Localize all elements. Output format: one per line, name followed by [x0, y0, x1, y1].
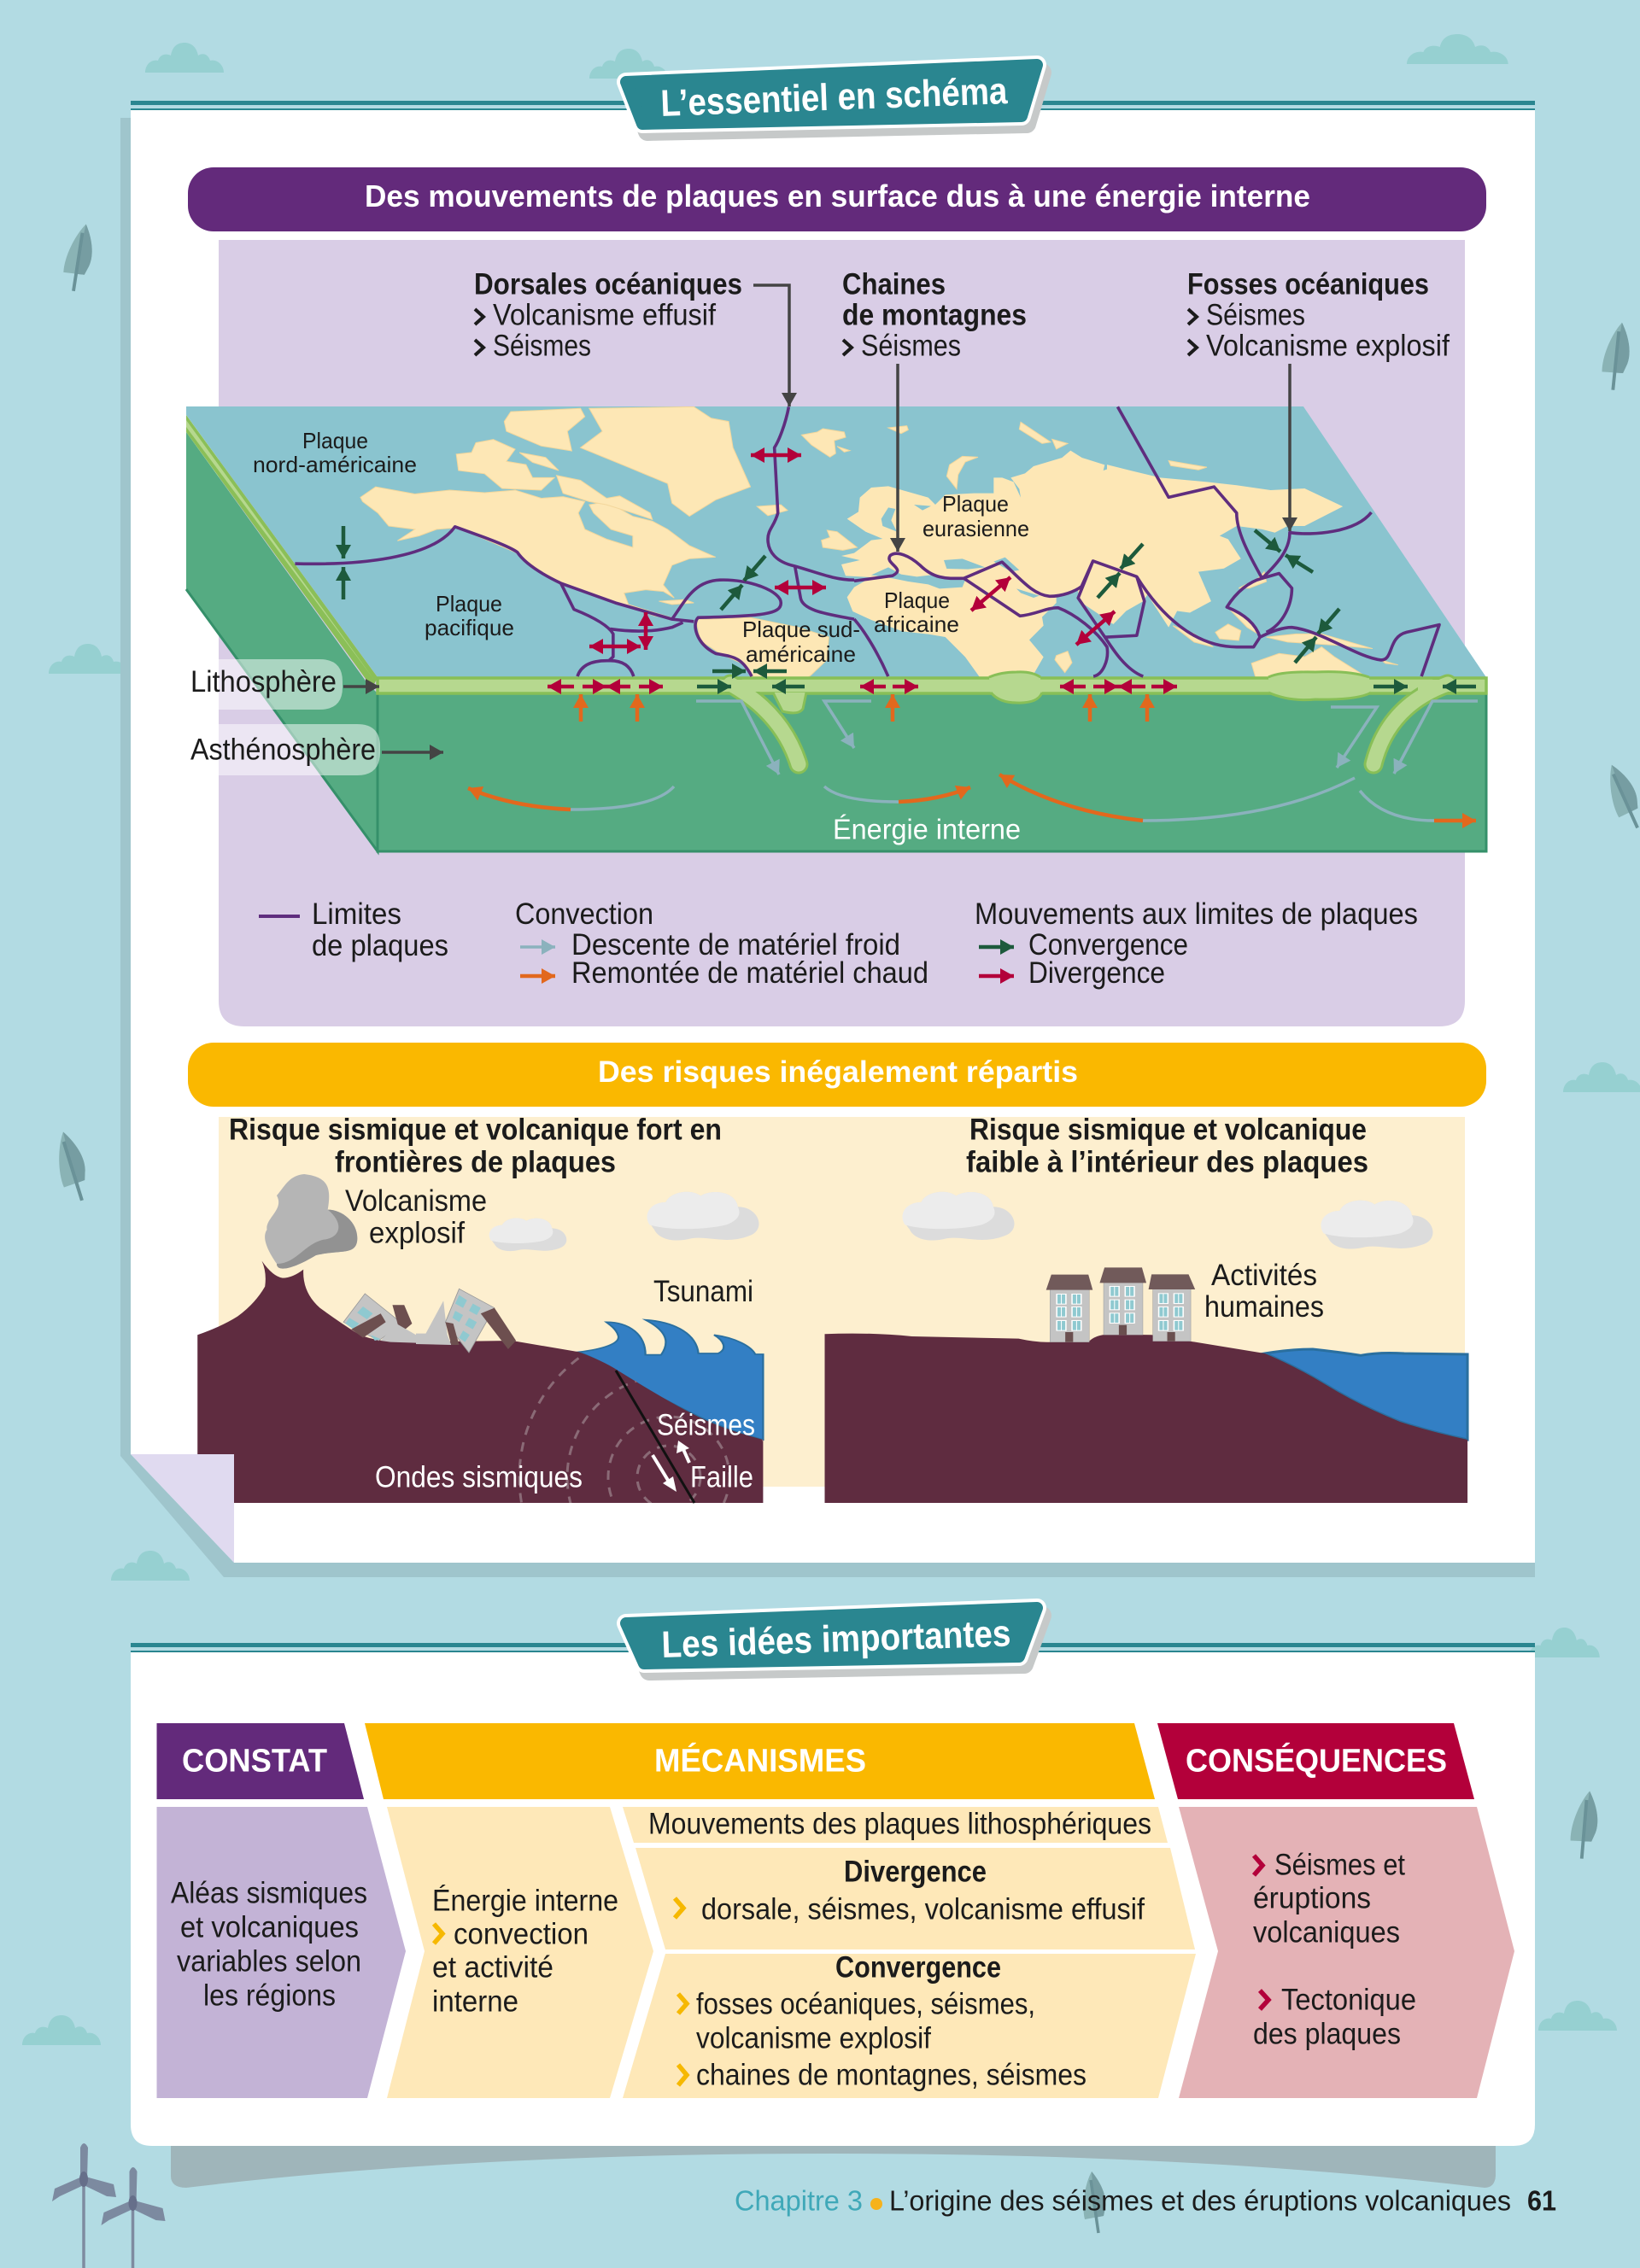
heading: risque fort — [229, 1114, 722, 1178]
label: dorsales océaniques — [474, 268, 742, 362]
legend: Divergence — [1028, 956, 1165, 990]
header rule — [131, 101, 1535, 110]
legend: Convection — [515, 897, 653, 931]
heading: risque fort: Risque sismique et volcanique fort en — [229, 1114, 722, 1146]
scene labels: Séismes — [657, 1409, 755, 1441]
scene: high risk — [197, 1174, 764, 1504]
box: convergence: chaines de montagnes, séismes — [696, 2058, 1086, 2092]
fault movement arrows — [653, 1441, 689, 1492]
heading: risque fort: frontières de plaques — [335, 1146, 616, 1178]
scene labels: explosif — [369, 1216, 465, 1250]
legend — [259, 897, 1418, 990]
header: conséquences — [1157, 1723, 1474, 1799]
panel: second white card — [131, 1651, 1535, 2146]
second header rule — [131, 1643, 1535, 1652]
box: divergence: Divergence — [844, 1855, 987, 1889]
map labels: africaine — [874, 611, 959, 637]
heading bar: mouvements de plaques — [188, 167, 1486, 231]
panel: risk background — [219, 1117, 1465, 1487]
plate boundaries west — [295, 406, 854, 676]
box: constat: les régions — [203, 1979, 336, 2012]
map labels: Plaque — [884, 587, 950, 613]
north and south America — [360, 406, 829, 678]
footer: L’origine des séismes et des éruptions volcaniques — [889, 2184, 1511, 2217]
legend: Mouvements aux limites de plaques — [975, 897, 1418, 931]
header: mécanismes: MÉCANISMES — [654, 1742, 866, 1780]
ground, sea and buildings — [825, 1267, 1467, 1503]
box: énergie interne: interne — [432, 1984, 518, 2019]
legend: de plaques — [312, 929, 448, 962]
header: constat — [157, 1723, 364, 1799]
panel: main white card — [131, 108, 1535, 1563]
label: dorsales océaniques: Dorsales océaniques — [474, 268, 742, 301]
box: énergie interne: convection — [454, 1918, 589, 1950]
label: dorsales océaniques: Volcanisme effusif — [493, 299, 716, 331]
map labels: Plaque — [942, 491, 1009, 517]
box: conséquences: volcaniques — [1253, 1916, 1400, 1949]
label: chaines de montagnes — [842, 268, 1027, 362]
map labels: eurasienne — [922, 516, 1029, 541]
leader arrows to labels — [753, 285, 1290, 552]
box: constat: variables selon — [177, 1945, 361, 1978]
header: conséquences: CONSÉQUENCES — [1186, 1742, 1447, 1780]
box: divergence: dorsale, séismes, volcanisme effusif — [701, 1892, 1145, 1926]
map labels: américaine — [746, 641, 856, 667]
box: conséquences: Séismes et — [1274, 1848, 1405, 1882]
sky clouds — [489, 1192, 1433, 1251]
heading: risque faible: Risque sismique et volcanique — [969, 1114, 1367, 1146]
box: énergie interne — [387, 1807, 653, 2098]
legend: Convergence — [1028, 928, 1188, 962]
map labels: Plaque — [436, 591, 502, 617]
card shadow — [120, 118, 1535, 1577]
scene labels: Volcanisme — [345, 1184, 487, 1218]
block: left face of lithosphere diagram — [186, 415, 378, 851]
map labels: nord-américaine — [253, 452, 417, 477]
legend: Limites — [312, 897, 401, 931]
tab: L'essentiel en schéma: L’essentiel en schéma — [660, 70, 1009, 125]
lithosphere band — [378, 672, 1486, 851]
seismic waves — [518, 1357, 763, 1503]
box: convergence — [623, 1950, 1196, 2098]
label: fosses océaniques: Volcanisme explosif — [1206, 330, 1450, 362]
Europe, Africa, western Asia — [801, 422, 1113, 677]
arrows: convergence on map — [343, 526, 1339, 663]
box: divergence — [636, 1848, 1195, 1949]
fault line — [616, 1371, 694, 1503]
box: convergence: Convergence — [835, 1950, 1001, 1984]
scene labels: Tsunami — [653, 1275, 753, 1308]
label: chaines de montagnes: Chaines — [842, 268, 946, 301]
scene labels: Faille — [690, 1460, 753, 1494]
header: mécanismes — [365, 1723, 1155, 1799]
box: énergie interne: Énergie interne — [432, 1884, 618, 1918]
label: chaines de montagnes: Séismes — [861, 330, 961, 362]
heading: risque faible — [966, 1114, 1368, 1178]
box: convergence: fosses océaniques, séismes, — [696, 1988, 1035, 2020]
tag: asthénosphère: Asthénosphère — [190, 733, 376, 767]
plate boundaries east — [854, 406, 1439, 676]
map labels: Plaque sud- — [742, 617, 860, 642]
box: constat: et volcaniques — [180, 1911, 359, 1944]
arrows: divergence on map — [589, 455, 1115, 650]
label: dorsales océaniques: Séismes — [493, 330, 591, 362]
map labels — [253, 428, 1029, 845]
map labels: Plaque — [302, 428, 368, 453]
box: conséquences: Tectonique — [1281, 1983, 1416, 2017]
legend: Descente de matériel froid — [571, 928, 900, 962]
footer: Chapitre 3 — [735, 2184, 863, 2217]
label: activités humaines: Activités — [1211, 1259, 1317, 1292]
box: constat — [157, 1807, 406, 2098]
arrows: lithosphere convergence — [697, 671, 1476, 687]
label: fosses océaniques: Séismes — [1206, 299, 1305, 331]
label: chaines de montagnes: de montagnes — [842, 299, 1027, 331]
collapsed buildings — [343, 1289, 516, 1353]
eastern Asia and Oceania — [1107, 461, 1398, 678]
box: convergence: volcanisme explosif — [696, 2022, 931, 2055]
box: constat: Aléas sismiques — [171, 1877, 367, 1909]
label: fosses océaniques: Fosses océaniques — [1187, 268, 1429, 301]
wind turbines — [52, 2143, 166, 2268]
label: activités humaines — [1204, 1259, 1324, 1324]
scene labels — [345, 1184, 755, 1494]
tag: lithosphère: Lithosphère — [190, 665, 337, 699]
box: énergie interne: et activité — [432, 1950, 554, 1984]
box: conséquences — [1179, 1807, 1514, 2098]
scene labels: Ondes sismiques — [375, 1460, 583, 1494]
header: constat: CONSTAT — [182, 1744, 327, 1780]
footer: 61 — [1527, 2184, 1556, 2217]
box: conséquences: éruptions — [1253, 1882, 1371, 1914]
scene: low risk — [825, 1259, 1467, 1503]
legend: Remontée de matériel chaud — [571, 956, 928, 990]
heading: risque faible: faible à l’intérieur des plaques — [966, 1146, 1368, 1178]
box: conséquences: des plaques — [1253, 2017, 1401, 2051]
arrows: cold material sinking — [696, 701, 1478, 775]
map labels: pacifique — [425, 615, 514, 640]
tab: Les idées importantes: Les idées importantes — [661, 1612, 1011, 1666]
arrows: lithosphere divergence — [548, 685, 1177, 688]
convection currents — [468, 775, 1476, 821]
heading bar: mouvements de plaques: Des mouvements de plaques en surface dus à une énergie interne — [365, 178, 1310, 213]
tag: lithosphère — [190, 659, 379, 710]
tag: asthénosphère — [190, 724, 443, 775]
map: world ocean and continents — [186, 406, 1486, 678]
map labels: Énergie interne — [833, 813, 1021, 845]
volcano and ground — [197, 1174, 763, 1503]
label: fosses océaniques — [1187, 268, 1450, 362]
book shadow under card — [171, 2146, 1496, 2188]
panel: lavender background — [219, 240, 1465, 1026]
page fold — [131, 1454, 234, 1563]
arrows: hot material rising — [581, 694, 1147, 722]
heading bar: risques — [188, 1043, 1486, 1107]
heading bar: risques: Des risques inégalement répartis — [598, 1055, 1078, 1089]
label: activités humaines: humaines — [1204, 1290, 1324, 1324]
box: mouvements des plaques: Mouvements des plaques lithosphériques — [648, 1807, 1151, 1841]
